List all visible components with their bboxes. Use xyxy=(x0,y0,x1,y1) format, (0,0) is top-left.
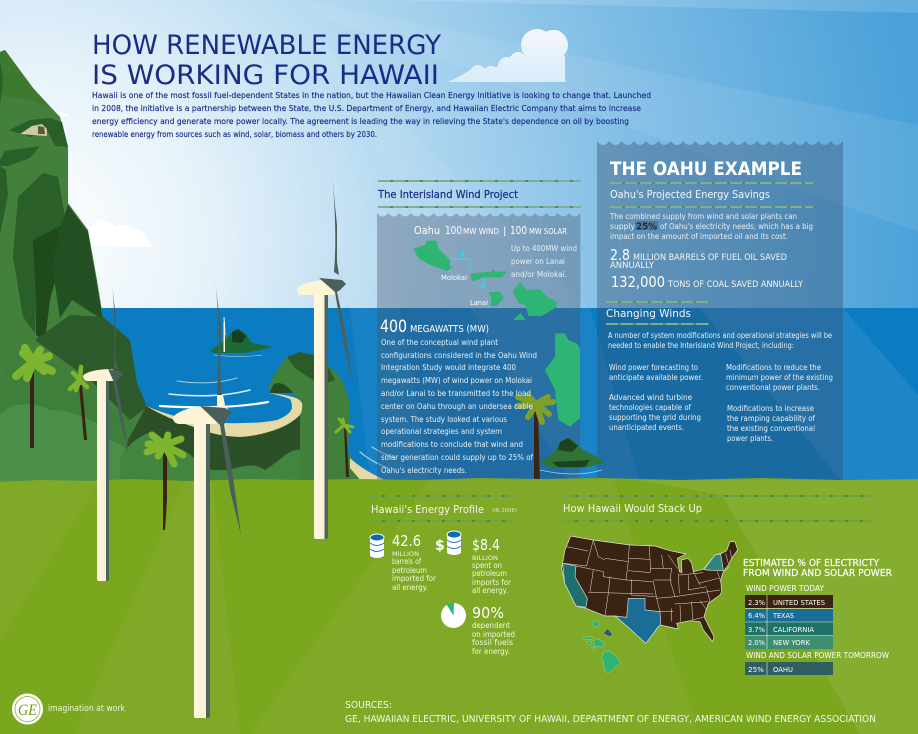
waves in bay xyxy=(160,355,395,468)
sources: SOURCES: xyxy=(345,700,392,711)
body text: system. The study looked at various xyxy=(381,415,507,424)
changing winds right column: the ramping capability of xyxy=(727,414,815,423)
stat: 42.6 million barrels: MILLION xyxy=(392,550,419,558)
island labels: Molokai xyxy=(441,274,467,282)
island near coast xyxy=(540,438,604,474)
changing winds right column: the existing conventional xyxy=(727,424,815,433)
table: wind power today: NEW YORK xyxy=(773,639,810,647)
body text: Oahu's electricity needs. xyxy=(381,466,467,475)
sea xyxy=(0,308,918,483)
changing winds right column: Modifications to reduce the xyxy=(726,363,821,372)
table heading: today: WIND POWER TODAY xyxy=(746,584,824,593)
beach xyxy=(145,393,302,437)
map caption: Oahu xyxy=(414,224,440,237)
chart title: ESTIMATED % OF ELECTRICTY xyxy=(743,558,880,569)
cloud: small left xyxy=(89,220,152,247)
stat: coal saved: 132,000 xyxy=(611,273,665,291)
panel: the oahu example background xyxy=(597,141,843,482)
changing winds intro: needed to enable the Interisland Wind Project, including: xyxy=(608,341,794,350)
cloud: top xyxy=(447,29,568,82)
stat: barrels saved: MILLION BARRELS OF FUEL OIL SAVED xyxy=(633,253,787,263)
section: how hawaii would stack up xyxy=(562,496,892,675)
map: hawaiian islands with cable routes xyxy=(413,241,580,427)
savings text: The combined supply from wind and solar plants can xyxy=(609,212,797,221)
stat: barrels saved xyxy=(610,246,787,271)
body text: configurations considered in the Oahu Wind xyxy=(381,351,537,360)
section: the interisland wind project xyxy=(377,181,581,475)
stat: 8.4 billion: spent on xyxy=(472,561,502,570)
section: the oahu example xyxy=(606,158,833,443)
stat: barrels saved: 2.8 xyxy=(610,246,630,264)
table: wind power today: 2.0% xyxy=(748,639,765,647)
intro text: Hawaii is one of the most fossil fuel-dependent States in the nation, but the Hawaiian Clean Energy Initiative is looking to change that. Launched xyxy=(92,90,651,100)
sky light rays xyxy=(300,0,918,310)
subheading: energy savings: Oahu's Projected Energy Savings xyxy=(610,188,770,201)
subheading: changing winds: Changing Winds xyxy=(606,307,691,320)
table: wind and solar tomorrow: OAHU xyxy=(773,666,793,674)
changing winds right column: conventional power plants. xyxy=(726,383,820,392)
table: wind power today: CALIFORNIA xyxy=(773,626,814,634)
heading: The Interisland Wind Project xyxy=(377,188,519,201)
changing winds left column: anticipate available power. xyxy=(609,373,703,382)
stat: coal saved: TONS OF COAL SAVED ANNUALLY xyxy=(667,280,804,290)
logo: GE imagination at work xyxy=(12,694,125,724)
savings text: of Oahu's electricity needs, which has a big xyxy=(660,222,813,231)
heading: Hawaii's Energy Profile xyxy=(371,503,484,516)
changing winds left column: unanticipated events. xyxy=(609,423,684,432)
map note: power on Lanai xyxy=(511,257,565,266)
map: hawaii and alaska insets xyxy=(583,620,621,673)
body text: megawatts (MW) of wind power on Molokai xyxy=(381,376,532,385)
stat: 90 percent xyxy=(472,604,515,656)
table heading: tomorrow: WIND AND SOLAR POWER TOMORROW xyxy=(746,651,889,660)
mountain xyxy=(0,50,240,482)
table: wind power today: 2.3% xyxy=(748,599,765,607)
chart title: FROM WIND AND SOLAR POWER xyxy=(743,568,892,579)
stat: 90 percent: 90% xyxy=(472,604,504,622)
savings text xyxy=(609,212,813,241)
stat: 8.4 billion: petroleum xyxy=(472,569,507,578)
intro text xyxy=(92,90,651,139)
map caption xyxy=(414,224,567,237)
map note: Up to 400MW wind xyxy=(511,244,577,253)
table: wind and solar tomorrow: 25% xyxy=(748,666,764,674)
map caption: MW SOLAR xyxy=(529,227,567,236)
intro text: renewable energy from sources such as wind, solar, biomass and others by 2030. xyxy=(92,129,377,139)
table: wind and solar tomorrow xyxy=(745,662,833,675)
table: wind power today: 3.7% xyxy=(748,626,765,634)
stat: 42.6 million barrels: 42.6 xyxy=(392,532,421,550)
cave on mountain xyxy=(20,124,47,136)
icon: dollar and barrel: $ xyxy=(435,538,445,554)
changing winds left column: Wind power forecasting to xyxy=(609,363,698,372)
sky background xyxy=(0,0,918,310)
wind turbine: left xyxy=(83,283,129,581)
stat: 8.4 billion: BILLION xyxy=(472,554,498,562)
heading: THE OAHU EXAMPLE xyxy=(610,158,802,180)
body text: operational strategies and system xyxy=(381,427,502,436)
table: wind power today: TEXAS xyxy=(772,612,795,620)
table: wind power today: UNITED STATES xyxy=(773,599,826,607)
stat: 90 percent: for energy. xyxy=(472,647,510,656)
stat: barrels saved: ANNUALLY xyxy=(610,261,655,271)
sources: GE, HAWAIIAN ELECTRIC, UNIVERSITY OF HAWAII, DEPARTMENT OF ENERGY, AMERICAN WIND ENERGY ASSOCIATION xyxy=(345,714,876,725)
changing winds right column: minimum power of the existing xyxy=(726,373,833,382)
stat: 8.4 billion: all energy. xyxy=(472,586,508,595)
savings text: 25% xyxy=(636,222,657,232)
stat: 42.6 million barrels: imported for xyxy=(392,574,437,583)
map: united states xyxy=(562,536,738,643)
stat: 90 percent: fossil fuels xyxy=(472,638,513,647)
island labels xyxy=(441,274,488,307)
400 megawatts stat: MEGAWATTS (MW) xyxy=(410,324,489,335)
changing winds intro: A number of system modifications and operational strategies will be xyxy=(608,331,832,340)
body text: One of the conceptual wind plant xyxy=(381,338,498,347)
palm tree: left large xyxy=(16,348,52,448)
palm tree: on panel xyxy=(518,396,553,484)
map caption: | xyxy=(503,226,506,237)
changing winds left column: Advanced wind turbine xyxy=(609,393,692,402)
stat: 90 percent: on imported xyxy=(472,630,515,639)
stat: 42.6 million barrels: all energy. xyxy=(392,583,428,592)
intro text: in 2008, the initiative is a partnership between the State, the U.S. Department of Energy, and Hawaiian Electric Company that aims to increase xyxy=(92,103,641,113)
land behind the beach xyxy=(120,405,312,482)
bushes along shore xyxy=(120,432,360,482)
400 megawatts stat xyxy=(380,317,489,337)
body text: center on Oahu through an undersea cable xyxy=(381,402,533,411)
body text: Integration Study would integrate 400 xyxy=(381,363,516,372)
cloud: behind mountain xyxy=(52,112,69,117)
stat: 90 percent: dependent xyxy=(472,621,510,630)
changing winds left column: technologies capable of xyxy=(609,403,691,412)
grass xyxy=(0,478,918,734)
palm tree: right headland xyxy=(336,419,353,477)
section: hawaii's energy profile xyxy=(370,496,517,656)
body text: solar generation could supply up to 25% of xyxy=(381,453,533,462)
changing winds right column: power plants. xyxy=(727,434,773,443)
body text: and/or Lanai to be transmitted to the load xyxy=(381,389,531,398)
chart title xyxy=(743,558,892,579)
table: wind power today xyxy=(745,595,833,649)
panel: interisland wind project background xyxy=(377,213,580,482)
logo: GE imagination at work: imagination at work xyxy=(48,704,125,714)
title: HOW RENEWABLE ENERGY xyxy=(92,30,441,61)
changing winds left column: supporting the grid during xyxy=(609,413,701,422)
map caption: 100 xyxy=(510,224,527,237)
palm tree: left small xyxy=(70,367,87,440)
changing winds intro xyxy=(608,331,832,350)
wind turbine: right xyxy=(297,175,353,539)
pie chart: 90 percent xyxy=(441,603,466,628)
intro text: energy efficiency and generate more power locally. The agreement is leading the way in relieving the State's dependence on oil by boosting xyxy=(92,116,629,126)
stat: 42.6 million barrels: barrels of xyxy=(392,557,421,566)
palm tree: centre xyxy=(147,435,183,530)
body text xyxy=(381,338,537,475)
400 megawatts stat: 400 xyxy=(380,317,407,337)
body text: modifications to conclude that wind and xyxy=(381,440,523,449)
distant island with small turbine xyxy=(210,317,273,353)
sea light rays xyxy=(350,308,918,483)
sources xyxy=(345,700,876,725)
title: IS WORKING FOR HAWAII xyxy=(92,60,439,91)
heading: How Hawaii Would Stack Up xyxy=(563,502,702,515)
changing winds right column: Modifications to increase xyxy=(727,404,814,413)
stat: 42.6 million barrels: petroleum xyxy=(392,566,427,575)
map note xyxy=(511,244,577,279)
year note: (IN 2008) xyxy=(492,508,517,514)
icon: oil barrel xyxy=(370,534,384,558)
table: wind power today: 6.4% xyxy=(748,612,765,620)
icon: dollar and barrel xyxy=(435,531,461,555)
changing winds right column xyxy=(726,363,833,443)
changing winds left column xyxy=(609,363,703,432)
right headland xyxy=(268,352,375,482)
title xyxy=(92,30,441,91)
wind turbine: centre xyxy=(173,280,241,718)
stat: coal saved xyxy=(611,273,804,291)
beach right xyxy=(350,458,390,482)
logo: GE imagination at work: GE xyxy=(18,702,37,719)
stat: 8.4 billion xyxy=(472,536,512,595)
savings text: supply xyxy=(610,222,635,231)
grass light rays xyxy=(0,480,918,734)
stat: 8.4 billion: imports for xyxy=(472,578,512,587)
map caption: 100 xyxy=(445,224,462,237)
map note: and/or Molokai. xyxy=(511,270,567,279)
map caption: MW WIND xyxy=(463,227,499,236)
savings text: impact on the amount of imported oil and its cost. xyxy=(610,232,788,241)
stat: 42.6 million barrels xyxy=(392,532,437,592)
island labels: Lanai xyxy=(470,299,488,307)
stat: 8.4 billion: $8.4 xyxy=(472,536,500,554)
